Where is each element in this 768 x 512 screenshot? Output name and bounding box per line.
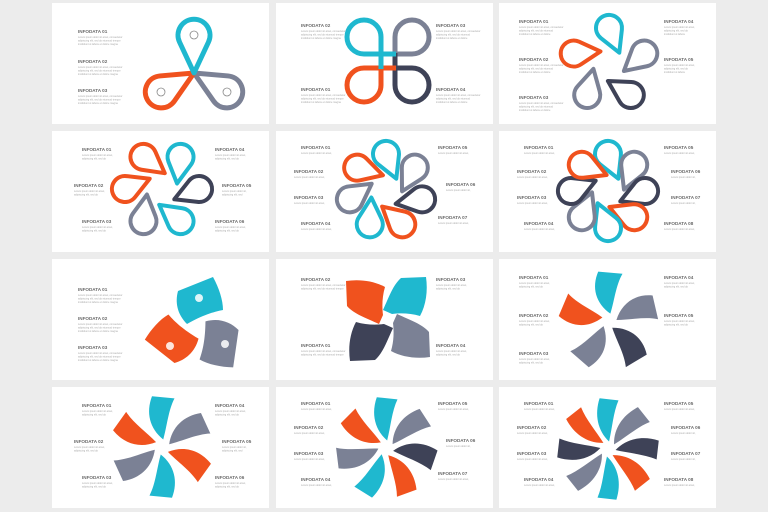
text: infodata 04: Lorem ipsum dolor sit amet, <box>436 350 467 353</box>
text: left column: INFODATA 01 <box>82 147 112 152</box>
text: left column: adipiscing elit, sed do <box>519 286 544 288</box>
text: left column: INFODATA 03 <box>82 219 112 224</box>
text: infodata 02: Lorem ipsum dolor sit amet, consectetur <box>519 64 564 67</box>
text: infodata 02: adipiscing elit, sed do eiusmod tempor <box>78 70 121 72</box>
text: infodata 03 <box>436 23 481 40</box>
text: infodata 02: Lorem ipsum dolor sit amet, consectetur <box>78 66 123 69</box>
text: left column <box>517 401 555 487</box>
diagram: pinwheel <box>334 397 438 499</box>
text: right column: INFODATA 06 <box>446 182 476 187</box>
text: left column: INFODATA 04 <box>524 221 554 226</box>
text: left column <box>294 145 332 231</box>
text: infodata 05: Lorem ipsum dolor sit amet, <box>664 64 695 67</box>
text: right column: INFODATA 05 <box>222 183 252 188</box>
text: right column <box>664 275 695 326</box>
text: infodata 01: incididunt ut labore et dolore magna <box>301 101 341 104</box>
text: infodata 04: INFODATA 04 <box>436 87 466 92</box>
text: infodata 02: incididunt ut labore et dolore magna <box>78 330 118 333</box>
text: right column: Lorem ipsum dolor sit amet, <box>438 478 469 481</box>
diagram: loops <box>139 19 249 114</box>
text: infodata 01 <box>301 343 346 356</box>
text: left column: Lorem ipsum dolor sit amet, <box>82 410 113 413</box>
text: left column: Lorem ipsum dolor sit amet, <box>301 484 332 487</box>
text: infodata 01: adipiscing elit, sed do eiusmod tempor <box>78 40 121 42</box>
text: left column: INFODATA 01 <box>524 401 554 406</box>
text: infodata 03: Lorem ipsum dolor sit amet, consectetur <box>436 30 481 33</box>
text: infodata 03: incididunt ut labore et dolore <box>436 37 468 40</box>
text: right column: INFODATA 05 <box>222 439 252 444</box>
text: infodata 04: adipiscing elit, sed do <box>664 30 689 32</box>
text: left column: adipiscing elit, sed do <box>74 194 99 196</box>
text: left column: INFODATA 03 <box>517 195 547 200</box>
text: right column: adipiscing elit, sed do <box>664 286 689 288</box>
text: left column: INFODATA 02 <box>294 169 324 174</box>
diagram: pinwheel <box>140 277 251 376</box>
slide 6: eight loops <box>499 131 716 252</box>
text: infodata 05: adipiscing elit, sed do <box>664 68 689 70</box>
text: right column: adipiscing elit, sed do <box>215 486 240 488</box>
text: right column: INFODATA 06 <box>215 475 245 480</box>
text: left column: INFODATA 01 <box>82 403 112 408</box>
text: right column: Lorem ipsum dolor sit amet, <box>664 282 695 285</box>
text: right column: INFODATA 07 <box>671 195 701 200</box>
text: right column: Lorem ipsum dolor sit, <box>222 446 247 449</box>
text: left column: Lorem ipsum dolor sit amet, <box>524 228 555 231</box>
text: left column: INFODATA 01 <box>519 275 549 280</box>
text: infodata 04: Lorem ipsum dolor sit amet, <box>664 26 695 29</box>
text: infodata 01: Lorem ipsum dolor sit amet, consectetur <box>78 294 123 297</box>
text: right column: Lorem ipsum dolor sit amet, <box>438 222 469 225</box>
text: right column: INFODATA 04 <box>215 147 245 152</box>
text: infodata 01 <box>519 19 564 36</box>
text: infodata 02: Lorem ipsum dolor sit amet, consectetur <box>301 30 346 33</box>
text: infodata 04 <box>664 19 695 36</box>
diagram: loops <box>554 137 662 245</box>
slide 4: six loops <box>52 131 269 252</box>
text: infodata 03: INFODATA 03 <box>519 95 549 100</box>
text: infodata 02: adipiscing elit, sed do eiusmod <box>519 68 554 70</box>
text: left column: Lorem ipsum dolor sit amet, <box>82 154 113 157</box>
text: infodata 03 <box>78 345 123 362</box>
text: infodata 01 <box>301 87 346 104</box>
text: left column: adipiscing elit, sed do <box>519 362 544 364</box>
text: left column: Lorem ipsum dolor sit amet, <box>519 320 550 323</box>
text: right column <box>438 145 476 225</box>
diagram: loops <box>332 137 437 243</box>
text: infodata 02 <box>78 316 123 333</box>
text: infodata 02: Lorem ipsum dolor sit amet, consectetur <box>301 284 346 287</box>
text: infodata 01: incididunt ut labore et dolore magna <box>78 301 118 304</box>
text: left column: Lorem ipsum dolor sit amet, <box>301 228 332 231</box>
text: right column: INFODATA 06 <box>446 438 476 443</box>
text: right column: Lorem ipsum dolor sit, <box>446 189 471 192</box>
text: left column: Lorem ipsum dolor sit amet, <box>294 458 325 461</box>
text: right column: Lorem ipsum dolor sit, <box>671 432 696 435</box>
text: infodata 03: INFODATA 03 <box>436 277 466 282</box>
slide 3: five loops <box>499 3 716 124</box>
slide 5: seven loops <box>276 131 493 252</box>
text: infodata 01 <box>78 29 123 46</box>
text: left column: adipiscing elit, sed do <box>82 414 107 416</box>
text: infodata 02 <box>301 23 346 40</box>
text: right column: INFODATA 05 <box>438 401 468 406</box>
diagram: loops <box>347 20 429 102</box>
text: left column <box>294 401 332 487</box>
text: right column: Lorem ipsum dolor sit amet, <box>438 152 469 155</box>
text: infodata 02: INFODATA 02 <box>519 57 549 62</box>
text: right column <box>664 145 701 231</box>
text: infodata 01: Lorem ipsum dolor sit amet, consectetur <box>78 36 123 39</box>
text: infodata 04 <box>436 87 481 104</box>
text: infodata 03: INFODATA 03 <box>78 345 108 350</box>
text: infodata 02 <box>301 277 346 290</box>
text: infodata 04: adipiscing elit, sed do <box>436 354 461 356</box>
text: right column: INFODATA 04 <box>215 403 245 408</box>
slide 12: eight blades <box>499 387 716 508</box>
text: right column: INFODATA 05 <box>664 401 694 406</box>
text: infodata 01: INFODATA 01 <box>519 19 549 24</box>
text: left column: Lorem ipsum dolor sit amet, <box>294 202 325 205</box>
slide 9: five blades <box>499 259 716 380</box>
text: infodata 03: INFODATA 03 <box>436 23 466 28</box>
text: infodata 02: adipiscing elit, sed do eiusmod tempor <box>301 288 344 290</box>
text: right column: Lorem ipsum dolor sit, <box>671 176 696 179</box>
text: left column: INFODATA 03 <box>517 451 547 456</box>
text: left column: adipiscing elit, sed do <box>82 486 107 488</box>
text: infodata 05 <box>664 57 695 74</box>
text: infodata 04: INFODATA 04 <box>664 19 694 24</box>
text: infodata 01: adipiscing elit, sed do eiusmod tempor <box>301 354 344 356</box>
text: infodata 02 <box>519 57 564 74</box>
text: infodata 03: INFODATA 03 <box>78 88 108 93</box>
text: infodata 01: INFODATA 01 <box>301 343 331 348</box>
text: infodata 01: incididunt ut labore et dolore <box>519 33 551 36</box>
text: left column: Lorem ipsum dolor sit amet, <box>519 358 550 361</box>
text: right column <box>215 403 252 488</box>
text: left column: INFODATA 02 <box>74 183 104 188</box>
text: right column: INFODATA 06 <box>671 169 701 174</box>
text: infodata 02: adipiscing elit, sed do eiusmod tempor <box>301 34 344 36</box>
text: left column: adipiscing elit, sed do <box>74 450 99 452</box>
text: right column: Lorem ipsum dolor sit amet, <box>664 408 695 411</box>
text: infodata 03: Lorem ipsum dolor sit amet, consectetur <box>78 95 123 98</box>
text: left column: INFODATA 02 <box>519 313 549 318</box>
text: right column: Lorem ipsum dolor sit amet, <box>215 410 246 413</box>
text: left column: Lorem ipsum dolor sit amet, <box>82 482 113 485</box>
diagram: pinwheel <box>558 272 660 369</box>
text: left column: INFODATA 03 <box>294 451 324 456</box>
text: left column: Lorem ipsum dolor sit amet, <box>524 484 555 487</box>
text: right column: Lorem ipsum dolor sit, <box>222 190 247 193</box>
text: left column: INFODATA 04 <box>301 477 331 482</box>
text: right column: adipiscing elit, sed <box>222 194 243 196</box>
text: infodata 01: adipiscing elit, sed do eiusmod tempor <box>301 98 344 100</box>
text: right column: INFODATA 06 <box>215 219 245 224</box>
text: right column: Lorem ipsum dolor sit amet, <box>664 484 695 487</box>
slide 1: three loops <box>52 3 269 124</box>
text: right column <box>664 401 701 487</box>
text: right column: Lorem ipsum dolor sit amet, <box>664 152 695 155</box>
slide 10: six blades <box>52 387 269 508</box>
text: right column: adipiscing elit, sed do <box>215 158 240 160</box>
text: right column: INFODATA 08 <box>664 477 694 482</box>
text: right column: INFODATA 05 <box>438 145 468 150</box>
text: infodata 04 <box>436 343 467 356</box>
text: left column <box>519 275 550 364</box>
text: right column: INFODATA 07 <box>438 215 468 220</box>
text: infodata 01: INFODATA 01 <box>78 29 108 34</box>
text: right column: Lorem ipsum dolor sit amet, <box>664 320 695 323</box>
text: infodata 03 <box>436 277 467 290</box>
text: left column: INFODATA 02 <box>74 439 104 444</box>
text: right column: INFODATA 08 <box>664 221 694 226</box>
text: right column: Lorem ipsum dolor sit amet, <box>215 226 246 229</box>
diagram: loops <box>560 11 663 113</box>
diagram: loops <box>108 139 216 239</box>
text: left column: Lorem ipsum dolor sit amet, <box>517 458 548 461</box>
text: left column: Lorem ipsum dolor sit amet, <box>294 176 325 179</box>
text: right column: INFODATA 05 <box>664 145 694 150</box>
text: infodata 02: Lorem ipsum dolor sit amet, consectetur <box>78 323 123 326</box>
text: infodata 04: INFODATA 04 <box>436 343 466 348</box>
slide 7: three blades <box>52 259 269 380</box>
diagram: pinwheel <box>557 398 659 500</box>
text: right column: adipiscing elit, sed do <box>215 230 240 232</box>
text: infodata 02: INFODATA 02 <box>301 23 331 28</box>
text: left column: Lorem ipsum dolor sit amet, <box>294 432 325 435</box>
text: left column: INFODATA 01 <box>301 145 331 150</box>
text: right column: Lorem ipsum dolor sit, <box>671 458 696 461</box>
text: infodata 03: adipiscing elit, sed do eiusmod tempor <box>78 356 121 358</box>
text: left column: Lorem ipsum dolor sit amet, <box>74 190 105 193</box>
text: left column <box>74 403 113 488</box>
text: left column: adipiscing elit, sed do <box>519 324 544 326</box>
text: left column: Lorem ipsum dolor sit amet, <box>524 408 555 411</box>
text: infodata 05: INFODATA 05 <box>664 57 694 62</box>
text: left column: Lorem ipsum dolor sit amet, <box>524 152 555 155</box>
text: left column: adipiscing elit, sed do <box>82 230 107 232</box>
text: infodata 02 <box>78 59 123 76</box>
text: infodata 03: Lorem ipsum dolor sit amet, consectetur <box>78 352 123 355</box>
text: infodata 01: Lorem ipsum dolor sit amet, consectetur <box>301 350 346 353</box>
text: infodata 03: incididunt ut labore et dolore <box>519 109 551 112</box>
text: infodata 02: incididunt ut labore et dolore <box>519 71 551 74</box>
text: infodata 02: INFODATA 02 <box>78 316 108 321</box>
text: right column <box>215 147 252 232</box>
text: right column: Lorem ipsum dolor sit, <box>446 445 471 448</box>
text: infodata 01: incididunt ut labore et dolore magna <box>78 43 118 46</box>
text: left column: INFODATA 03 <box>294 195 324 200</box>
text: left column: INFODATA 04 <box>524 477 554 482</box>
text: left column: Lorem ipsum dolor sit amet, <box>74 446 105 449</box>
text: left column: Lorem ipsum dolor sit amet, <box>301 152 332 155</box>
slide 8: four blades <box>276 259 493 380</box>
text: right column: Lorem ipsum dolor sit, <box>671 202 696 205</box>
text: infodata 01: Lorem ipsum dolor sit amet, consectetur <box>301 94 346 97</box>
text: right column: adipiscing elit, sed do <box>664 324 689 326</box>
text: infodata 02: incididunt ut labore et dolore magna <box>78 73 118 76</box>
text: left column: INFODATA 01 <box>524 145 554 150</box>
text: infodata 03 <box>78 88 123 105</box>
text: left column: Lorem ipsum dolor sit amet, <box>519 282 550 285</box>
text: right column: INFODATA 06 <box>671 425 701 430</box>
text: infodata 03: adipiscing elit, sed do eiusmod <box>519 106 554 108</box>
text: left column: INFODATA 01 <box>301 401 331 406</box>
diagram: pinwheel <box>346 277 430 361</box>
text: right column: Lorem ipsum dolor sit amet, <box>215 482 246 485</box>
text: left column: Lorem ipsum dolor sit amet, <box>517 432 548 435</box>
text: left column: Lorem ipsum dolor sit amet, <box>517 176 548 179</box>
text: left column: INFODATA 03 <box>82 475 112 480</box>
text: left column: INFODATA 02 <box>294 425 324 430</box>
text: infodata 03: adipiscing elit, sed do eiusmod tempor <box>78 98 121 102</box>
text: left column: INFODATA 03 <box>519 351 549 356</box>
text: right column: adipiscing elit, sed <box>222 450 243 452</box>
text: infodata 03 <box>519 95 564 112</box>
diagram: pinwheel <box>112 396 212 498</box>
text: infodata 01 <box>78 287 123 304</box>
text: infodata 02: adipiscing elit, sed do eiusmod tempor <box>78 326 121 330</box>
text: left column <box>517 145 555 231</box>
text: right column: INFODATA 07 <box>438 471 468 476</box>
text: infodata 04: adipiscing elit, sed do eiusmod <box>436 98 471 100</box>
text: right column: INFODATA 05 <box>664 313 694 318</box>
text: infodata 02: INFODATA 02 <box>78 59 108 64</box>
text: right column: Lorem ipsum dolor sit amet, <box>215 154 246 157</box>
text: infodata 01: INFODATA 01 <box>301 87 331 92</box>
text: right column: adipiscing elit, sed do <box>215 414 240 416</box>
text: left column <box>74 147 113 232</box>
text: infodata 03: adipiscing elit, sed do <box>436 288 461 290</box>
text: infodata 03: Lorem ipsum dolor sit amet, consectetur <box>519 102 564 105</box>
text: right column <box>438 401 476 481</box>
text: infodata 05: incididunt ut labore <box>664 71 686 74</box>
text: infodata 01: adipiscing elit, sed do eiusmod tempor <box>78 298 121 300</box>
text: right column: INFODATA 04 <box>664 275 694 280</box>
text: infodata 01: INFODATA 01 <box>78 287 108 292</box>
text: left column: Lorem ipsum dolor sit amet, <box>517 202 548 205</box>
text: infodata 03: incididunt ut labore et dolore magna <box>78 359 118 362</box>
text: infodata 04: Lorem ipsum dolor sit amet, consectetur <box>436 94 481 97</box>
text: infodata 01: Lorem ipsum dolor sit amet, consectetur <box>519 26 564 29</box>
text: left column: adipiscing elit, sed do <box>82 158 107 160</box>
text: left column: Lorem ipsum dolor sit amet, <box>301 408 332 411</box>
text: infodata 03: Lorem ipsum dolor sit amet, <box>436 284 467 287</box>
text: left column: INFODATA 04 <box>301 221 331 226</box>
slide 11: seven blades <box>276 387 493 508</box>
text: right column: INFODATA 07 <box>671 451 701 456</box>
text: infodata 04: incididunt ut labore <box>664 33 686 36</box>
text: infodata 03: incididunt ut labore et dolore magna <box>78 102 118 105</box>
text: left column: INFODATA 02 <box>517 169 547 174</box>
text: infodata 03: adipiscing elit, sed do eiusmod <box>436 34 471 36</box>
text: left column: INFODATA 02 <box>517 425 547 430</box>
slide 2: four loops <box>276 3 493 124</box>
text: left column: Lorem ipsum dolor sit amet, <box>82 226 113 229</box>
text: infodata 02: incididunt ut labore et dolore magna <box>301 37 341 40</box>
text: infodata 02: INFODATA 02 <box>301 277 331 282</box>
text: infodata 01: adipiscing elit, sed do eiusmod <box>519 30 554 32</box>
text: infodata 04: incididunt ut labore et dolore <box>436 101 468 104</box>
text: right column: Lorem ipsum dolor sit amet, <box>664 228 695 231</box>
text: right column: Lorem ipsum dolor sit amet, <box>438 408 469 411</box>
